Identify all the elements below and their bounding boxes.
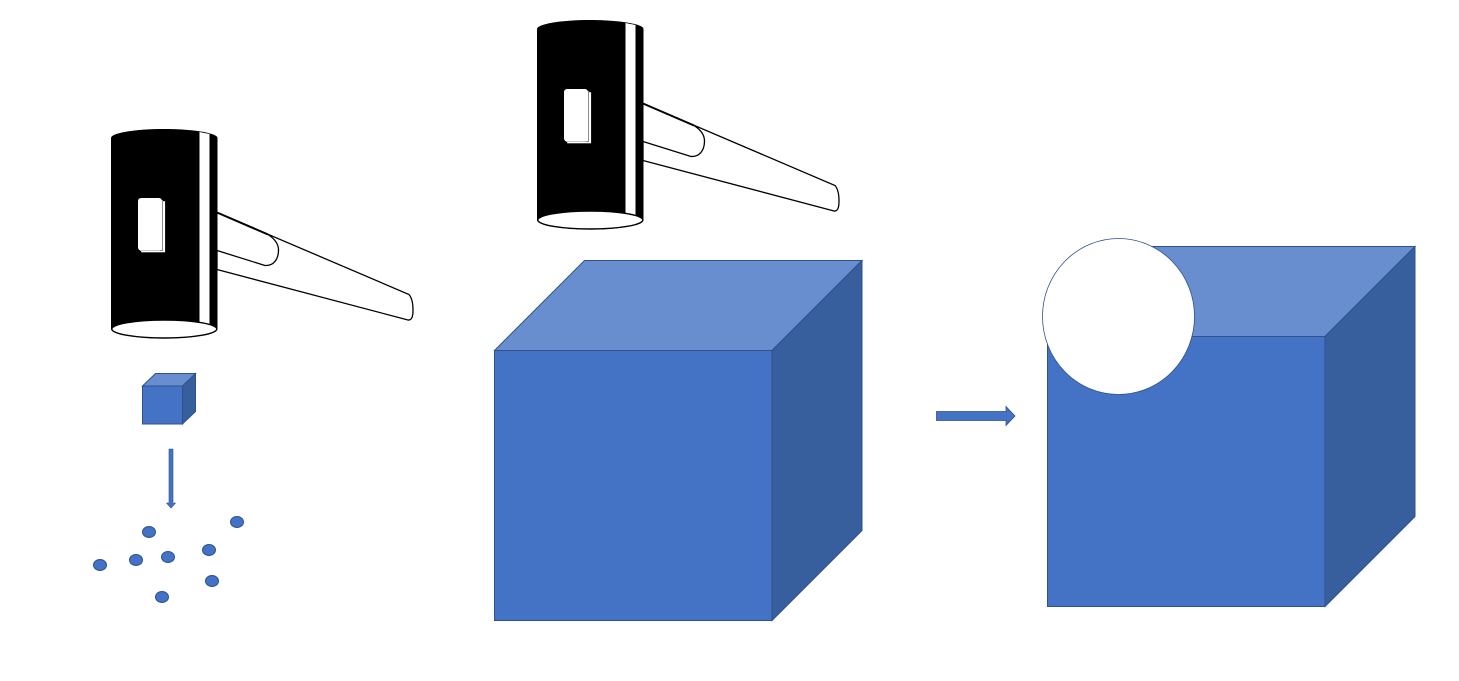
scattered particles (94, 516, 244, 602)
arrow: down (166, 449, 176, 508)
large cube (494, 260, 862, 620)
dented cube (1042, 238, 1415, 606)
left hammer (111, 129, 413, 338)
dent: white circle (1042, 238, 1194, 394)
small cube (142, 374, 196, 424)
top hammer (537, 20, 839, 230)
arrow: right (936, 406, 1015, 426)
